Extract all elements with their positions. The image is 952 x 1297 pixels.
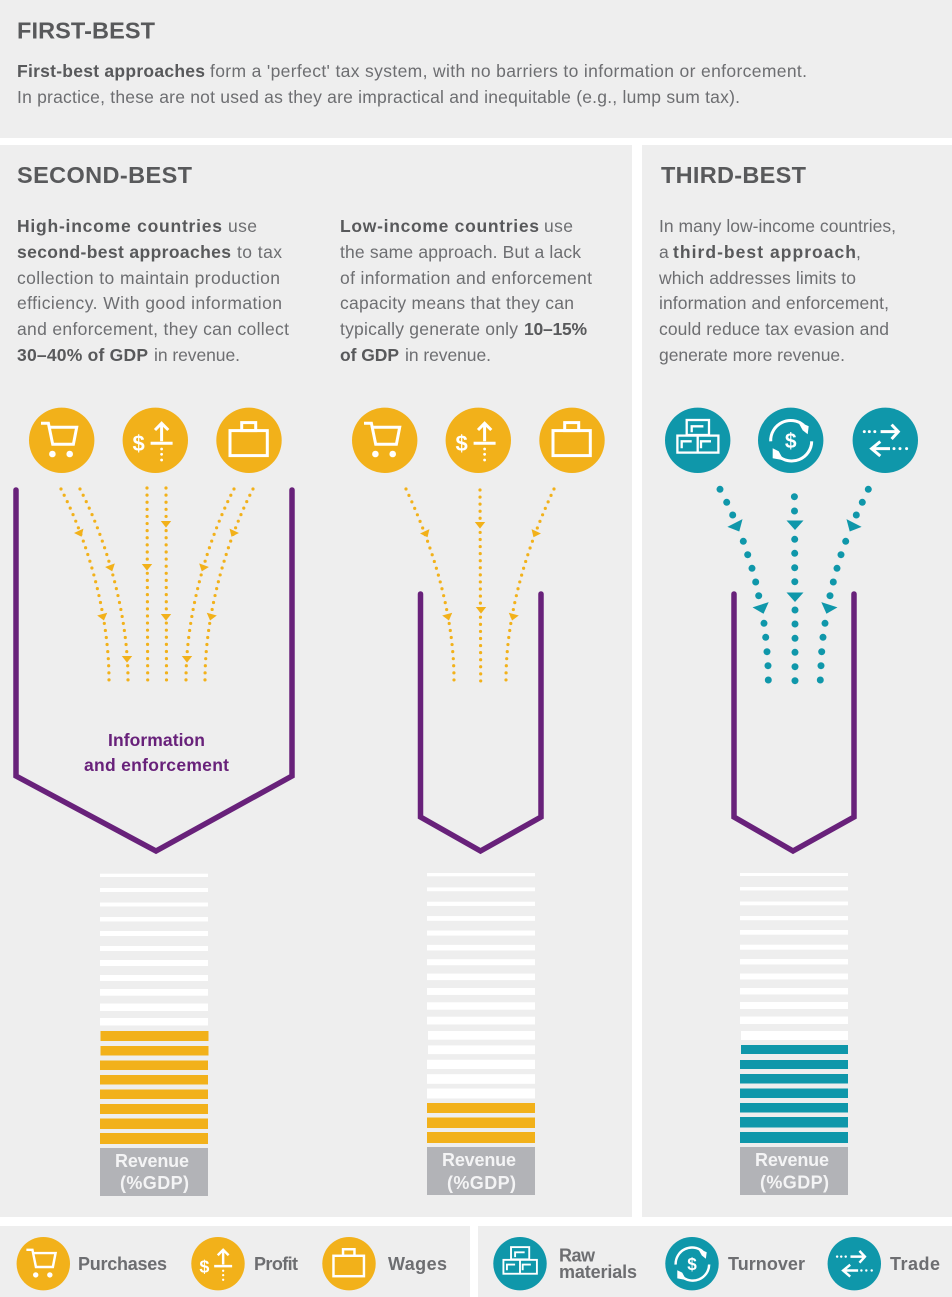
legend: second-best tax bases xyxy=(0,1226,470,1297)
text block: third-best description: could reduce tax evasion and xyxy=(659,319,889,339)
revenue bars: third-best: Revenue xyxy=(755,1150,829,1170)
revenue bars: low-income: (%GDP) xyxy=(447,1173,516,1193)
text block: third-best description: generate more revenue. xyxy=(659,345,845,365)
text block: first-best description: form a 'perfect' tax system, with no barriers to information or enforcement. xyxy=(210,61,807,81)
icons: high-income tax bases xyxy=(29,408,282,473)
text block: low-income countries: typically generate only xyxy=(340,319,518,339)
text block: third-best description: a xyxy=(659,242,669,262)
revenue bars: low-income: Revenue xyxy=(442,1150,516,1170)
revenue bars: low-income xyxy=(427,873,535,1195)
legend item: purchases xyxy=(17,1237,167,1290)
text block: high-income countries: in revenue. xyxy=(154,345,240,365)
text block: high-income countries: collection to maintain production xyxy=(17,268,280,288)
legend: third-best tax bases xyxy=(478,1226,952,1297)
text block: high-income countries: 30–40% of GDP xyxy=(17,345,148,365)
funnel: low-income information and enforcement xyxy=(420,594,541,851)
text block: first-best description: In practice, these are not used as they are impractical and inequitable (e.g., lump sum tax). xyxy=(17,87,740,107)
arrows: third-best dotted flows xyxy=(716,486,872,684)
label: information and enforcement: and enforcement xyxy=(84,755,229,775)
text block: low-income countries: in revenue. xyxy=(405,345,491,365)
revenue bars: high-income xyxy=(100,874,208,1196)
legend item: trade xyxy=(828,1237,940,1290)
text block: low-income countries: 10–15% xyxy=(524,319,587,339)
text block: high-income countries: efficiency. With good information xyxy=(17,293,282,313)
legend item: raw materials xyxy=(493,1237,637,1290)
legend item: wages xyxy=(322,1237,447,1290)
heading: first-best: FIRST-BEST xyxy=(17,18,156,44)
legend item: turnover: Turnover xyxy=(728,1254,805,1274)
legend item: profit xyxy=(191,1237,298,1290)
legend item: wages: Wages xyxy=(388,1254,447,1274)
legend item: raw materials: materials xyxy=(559,1262,637,1282)
label: information and enforcement: Information xyxy=(108,730,205,750)
revenue bars: high-income: Revenue xyxy=(115,1151,189,1171)
heading: third-best: THIRD-BEST xyxy=(661,162,807,188)
revenue bars: high-income: (%GDP) xyxy=(120,1173,189,1193)
text block: low-income countries: of information and enforcement xyxy=(340,268,592,288)
legend item: profit: Profit xyxy=(254,1254,298,1274)
text block: high-income countries: use xyxy=(228,216,257,236)
panel: first-best xyxy=(0,0,952,138)
text block: low-income countries xyxy=(340,216,592,365)
text block: third-best description xyxy=(658,216,896,365)
heading: second-best: SECOND-BEST xyxy=(17,162,193,188)
legend item: purchases: Purchases xyxy=(78,1254,167,1274)
arrows: high-income dotted flows xyxy=(61,488,253,680)
icons: low-income tax bases xyxy=(352,408,605,473)
arrows: low-income dotted flows xyxy=(406,489,554,681)
text block: low-income countries: of GDP xyxy=(340,345,399,365)
text block: high-income countries: to tax xyxy=(237,242,282,262)
revenue bars: third-best: (%GDP) xyxy=(760,1172,829,1192)
funnel: high-income information and enforcement xyxy=(16,490,292,851)
text block: third-best description: third-best approach xyxy=(673,242,856,262)
panel: third-best xyxy=(642,145,952,1217)
text block: high-income countries: second-best approaches xyxy=(17,242,231,262)
icons: third-best tax bases xyxy=(665,408,918,473)
text block: high-income countries xyxy=(17,216,289,365)
text block: high-income countries: and enforcement, they can collect xyxy=(17,319,289,339)
label: information and enforcement xyxy=(84,730,229,775)
text block: low-income countries: capacity means that they can xyxy=(340,293,574,313)
text block: third-best description: which addresses limits to xyxy=(658,268,856,288)
text block: first-best description xyxy=(17,61,807,107)
panel: second-best xyxy=(0,145,632,1217)
funnel: third-best information and enforcement xyxy=(734,594,854,851)
legend item: raw materials: Raw xyxy=(559,1246,596,1266)
text block: high-income countries: High-income countries xyxy=(17,216,222,236)
text block: first-best description: First-best approaches xyxy=(17,61,205,81)
legend item: trade: Trade xyxy=(890,1254,940,1274)
text block: third-best description: In many low-income countries, xyxy=(659,216,896,236)
text block: low-income countries: use xyxy=(544,216,573,236)
text block: low-income countries: Low-income countries xyxy=(340,216,539,236)
revenue bars: third-best xyxy=(740,873,848,1195)
legend item: turnover xyxy=(665,1237,805,1290)
text block: low-income countries: the same approach. But a lack xyxy=(340,242,581,262)
text block: third-best description: , xyxy=(856,242,861,262)
text block: third-best description: information and enforcement, xyxy=(659,293,889,313)
